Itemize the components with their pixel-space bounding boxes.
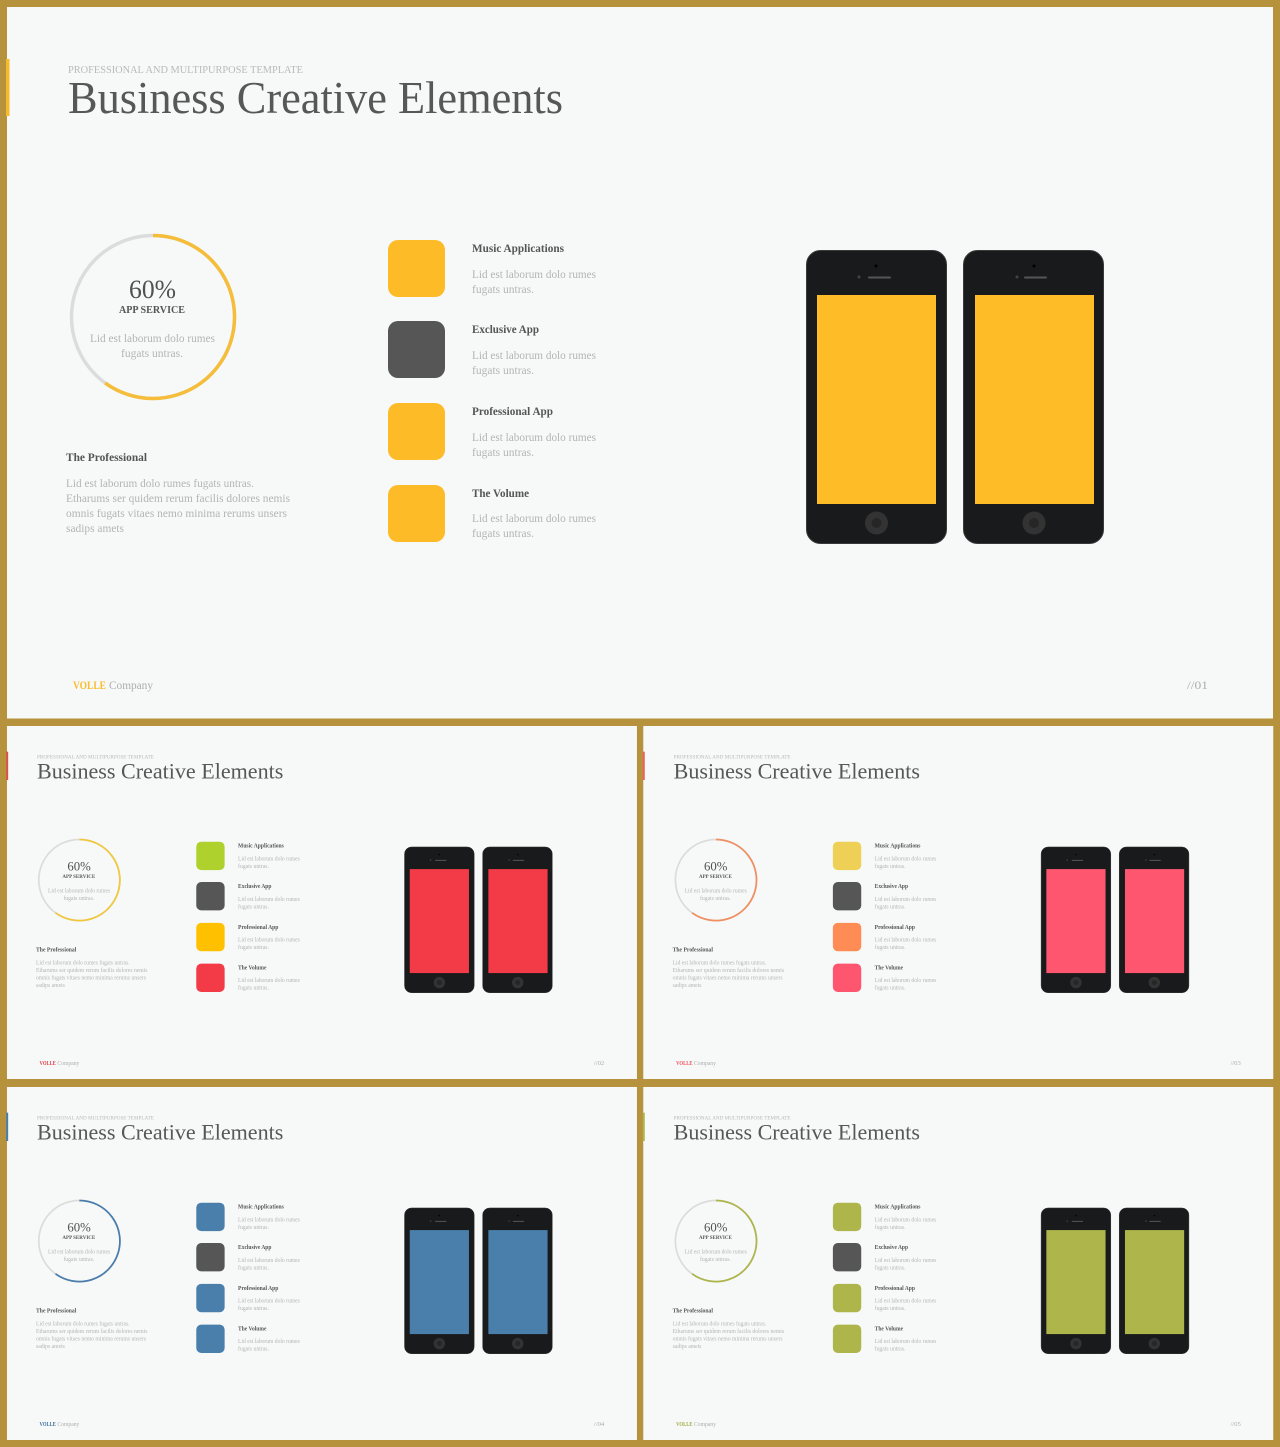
item: music applications: fugats untras.: [238, 1224, 269, 1231]
item: music applications: Lid est laborum dolo rumes: [875, 1218, 937, 1224]
item: music applications: Music Applications: [875, 1205, 921, 1211]
footer brand: VOLLE: [676, 1422, 693, 1428]
feature list: [833, 842, 937, 992]
subtitle: PROFESSIONAL AND MULTIPURPOSE TEMPLATE: [68, 65, 303, 76]
text block: the professional: sadips amets: [66, 523, 125, 535]
item: music applications: Lid est laborum dolo rumes: [875, 857, 937, 863]
page number: //02: [594, 1061, 604, 1067]
item: the volume: The Volume: [875, 966, 903, 972]
phone right: [1119, 1208, 1189, 1354]
subtitle: PROFESSIONAL AND MULTIPURPOSE TEMPLATE: [674, 755, 791, 761]
item: exclusive app: Exclusive App: [472, 324, 539, 336]
ring label: [90, 275, 216, 360]
item: the volume: The Volume: [472, 488, 529, 500]
item: exclusive app: fugats untras.: [472, 365, 534, 377]
phone left: [405, 1208, 474, 1354]
item: the volume: Lid est laborum dolo rumes: [875, 1339, 937, 1345]
title: Business Creative Elements: [37, 759, 283, 784]
footer brand: Company: [694, 1061, 716, 1067]
footer brand: VOLLE: [73, 680, 106, 692]
text block: the professional: [36, 948, 148, 989]
item: exclusive app: Exclusive App: [875, 884, 908, 890]
item: professional app: Lid est laborum dolo rumes: [472, 432, 597, 444]
text block: the professional: omnis fugats vitaes nemo minima rerums unsers: [673, 1336, 783, 1343]
footer brand: VOLLE: [40, 1422, 56, 1428]
text block: the professional: omnis fugats vitaes nemo minima rerums unsers: [673, 975, 783, 982]
item: professional app: fugats untras.: [472, 447, 534, 459]
accent bar: [643, 752, 645, 780]
ring label: 60%: [129, 275, 176, 304]
footer brand: [676, 1422, 716, 1428]
item: professional app: Professional App: [238, 925, 278, 931]
text block: the professional: Etharums ser quidem rerum facilis dolores nemis: [36, 967, 148, 974]
ring label: fugats untras.: [63, 1256, 95, 1263]
item: music applications: fugats untras.: [472, 284, 534, 296]
item: music applications: Lid est laborum dolo rumes: [238, 857, 301, 863]
ring label: [48, 1220, 111, 1263]
item: the volume: Lid est laborum dolo rumes: [875, 978, 937, 984]
text block: the professional: Lid est laborum dolo rumes fugats untras.: [36, 1321, 130, 1328]
footer brand: Company: [57, 1061, 79, 1067]
footer brand: VOLLE: [676, 1061, 693, 1067]
item: the volume: fugats untras.: [875, 1346, 906, 1353]
text block: the professional: [673, 1309, 785, 1350]
item: exclusive app: fugats untras.: [238, 903, 269, 910]
item: the volume: The Volume: [238, 966, 267, 972]
item: professional app: Lid est laborum dolo rumes: [238, 1299, 301, 1305]
footer brand: [40, 1061, 79, 1067]
item: exclusive app: [833, 1243, 937, 1271]
item: music applications: [833, 1203, 937, 1231]
subtitle: PROFESSIONAL AND MULTIPURPOSE TEMPLATE: [674, 1116, 791, 1122]
feature list: [196, 1203, 301, 1353]
item: music applications: [388, 240, 597, 297]
item: exclusive app: Lid est laborum dolo rumes: [875, 897, 937, 903]
footer brand: [676, 1061, 716, 1067]
ring label: 60%: [704, 859, 728, 874]
footer brand: Company: [57, 1422, 79, 1428]
progress ring: [39, 839, 120, 921]
feature list: [833, 1203, 937, 1353]
item: professional app: Professional App: [238, 1286, 278, 1292]
item: music applications: fugats untras.: [238, 863, 269, 870]
text block: the professional: omnis fugats vitaes nemo minima rerums unsers: [36, 1336, 147, 1343]
phone left: [806, 250, 946, 544]
phone right: [483, 847, 552, 993]
footer brand: Company: [694, 1422, 716, 1428]
page number: //05: [1230, 1422, 1241, 1428]
ring label: fugats untras.: [63, 895, 95, 902]
subtitle: PROFESSIONAL AND MULTIPURPOSE TEMPLATE: [37, 755, 154, 761]
progress ring: [72, 235, 235, 398]
text block: the professional: sadips amets: [36, 1344, 66, 1350]
item: professional app: [196, 923, 301, 951]
item: professional app: fugats untras.: [875, 1305, 906, 1312]
ring label: 60%: [67, 1220, 91, 1235]
item: the volume: fugats untras.: [875, 985, 906, 992]
item: the volume: fugats untras.: [238, 985, 269, 992]
ring label: APP SERVICE: [699, 874, 732, 880]
item: professional app: Lid est laborum dolo rumes: [875, 1299, 937, 1305]
ring label: Lid est laborum dolo rumes: [48, 1249, 111, 1255]
item: the volume: fugats untras.: [472, 528, 534, 540]
item: exclusive app: [388, 321, 597, 378]
text block: the professional: sadips amets: [673, 983, 702, 989]
ring label: Lid est laborum dolo rumes: [48, 888, 111, 894]
item: professional app: Lid est laborum dolo rumes: [238, 938, 301, 944]
page number: //01: [1187, 680, 1208, 692]
item: exclusive app: [833, 882, 937, 910]
panel: red slide: [6, 726, 637, 1079]
text block: the professional: The Professional: [673, 948, 713, 954]
item: professional app: [196, 1284, 301, 1312]
ring label: [685, 859, 748, 902]
item: exclusive app: fugats untras.: [875, 903, 906, 910]
text block: the professional: [66, 452, 291, 535]
text block: the professional: Lid est laborum dolo rumes fugats untras.: [673, 960, 767, 967]
text block: the professional: The Professional: [36, 1309, 77, 1315]
item: music applications: Music Applications: [238, 844, 285, 850]
page number: //03: [1230, 1061, 1241, 1067]
title: Business Creative Elements: [674, 1120, 920, 1145]
ring label: Lid est laborum dolo rumes: [685, 888, 748, 894]
item: the volume: [196, 1325, 301, 1353]
item: exclusive app: Lid est laborum dolo rumes: [238, 1258, 301, 1264]
phone left: [1041, 847, 1111, 993]
ring label: fugats untras.: [700, 1256, 731, 1263]
item: music applications: [833, 842, 937, 870]
item: exclusive app: Lid est laborum dolo rumes: [875, 1258, 937, 1264]
text block: the professional: Etharums ser quidem rerum facilis dolores nemis: [66, 493, 291, 505]
accent bar: [6, 59, 10, 116]
phone right: [964, 250, 1104, 544]
ring label: [685, 1220, 748, 1263]
progress ring: [675, 839, 757, 921]
text block: the professional: The Professional: [36, 948, 77, 954]
item: professional app: fugats untras.: [875, 944, 906, 951]
ring label: fugats untras.: [121, 348, 183, 360]
item: exclusive app: Exclusive App: [875, 1245, 908, 1251]
text block: the professional: Lid est laborum dolo rumes fugats untras.: [673, 1321, 767, 1328]
ring label: 60%: [704, 1220, 728, 1235]
text block: the professional: Etharums ser quidem rerum facilis dolores nemis: [673, 967, 785, 974]
title: Business Creative Elements: [674, 759, 920, 784]
ring label: fugats untras.: [700, 895, 731, 902]
phone right: [1119, 847, 1189, 993]
item: music applications: fugats untras.: [875, 1224, 906, 1231]
item: professional app: Professional App: [875, 1286, 915, 1292]
item: professional app: Professional App: [875, 925, 915, 931]
subtitle: PROFESSIONAL AND MULTIPURPOSE TEMPLATE: [37, 1116, 154, 1122]
item: music applications: [196, 1203, 301, 1231]
ring label: Lid est laborum dolo rumes: [685, 1249, 748, 1255]
item: the volume: The Volume: [238, 1327, 267, 1333]
accent bar: [643, 1113, 645, 1141]
panel: olive slide: [643, 1087, 1273, 1440]
text block: the professional: Etharums ser quidem rerum facilis dolores nemis: [36, 1328, 148, 1335]
item: the volume: [388, 485, 597, 542]
feature list: [388, 240, 597, 542]
ring label: Lid est laborum dolo rumes: [90, 333, 216, 345]
phone left: [405, 847, 474, 993]
item: exclusive app: [196, 1243, 301, 1271]
accent bar: [6, 1113, 8, 1141]
ring label: APP SERVICE: [62, 874, 96, 880]
item: music applications: fugats untras.: [875, 863, 906, 870]
text block: the professional: omnis fugats vitaes nemo minima rerums unsers: [66, 508, 288, 520]
item: the volume: Lid est laborum dolo rumes: [472, 513, 597, 525]
text block: the professional: sadips amets: [673, 1344, 702, 1350]
phone right: [483, 1208, 552, 1354]
ring label: APP SERVICE: [119, 304, 185, 316]
title: Business Creative Elements: [37, 1120, 283, 1145]
progress ring: [675, 1200, 757, 1282]
item: exclusive app: Lid est laborum dolo rumes: [238, 897, 301, 903]
ring label: 60%: [67, 859, 91, 874]
item: music applications: [196, 842, 301, 870]
item: exclusive app: fugats untras.: [875, 1264, 906, 1271]
item: the volume: Lid est laborum dolo rumes: [238, 978, 301, 984]
accent bar: [6, 752, 8, 780]
text block: the professional: [673, 948, 785, 989]
text block: the professional: Lid est laborum dolo rumes fugats untras.: [36, 960, 130, 967]
panel: pink slide: [643, 726, 1273, 1079]
item: professional app: [388, 403, 597, 460]
panel: large yellow slide: [6, 7, 1273, 718]
item: music applications: Music Applications: [238, 1205, 285, 1211]
item: exclusive app: [196, 882, 301, 910]
item: exclusive app: Lid est laborum dolo rumes: [472, 350, 597, 362]
title: Business Creative Elements: [68, 73, 563, 123]
ring label: APP SERVICE: [699, 1235, 732, 1241]
progress ring: [39, 1200, 120, 1282]
panel: blue slide: [6, 1087, 637, 1440]
page number: //04: [594, 1422, 604, 1428]
phone left: [1041, 1208, 1111, 1354]
item: exclusive app: fugats untras.: [238, 1264, 269, 1271]
footer brand: Company: [109, 680, 153, 692]
item: the volume: [833, 964, 937, 992]
text block: the professional: sadips amets: [36, 983, 66, 989]
footer brand: [40, 1422, 79, 1428]
item: professional app: [833, 923, 937, 951]
item: professional app: Professional App: [472, 406, 553, 418]
item: exclusive app: Exclusive App: [238, 1245, 271, 1251]
item: exclusive app: Exclusive App: [238, 884, 271, 890]
text block: the professional: The Professional: [673, 1309, 713, 1315]
item: music applications: Lid est laborum dolo rumes: [472, 269, 597, 281]
item: professional app: fugats untras.: [238, 944, 269, 951]
text block: the professional: The Professional: [66, 452, 147, 464]
text block: the professional: Lid est laborum dolo rumes fugats untras.: [66, 478, 254, 490]
item: professional app: fugats untras.: [238, 1305, 269, 1312]
text block: the professional: [36, 1309, 148, 1350]
item: the volume: Lid est laborum dolo rumes: [238, 1339, 301, 1345]
item: professional app: [833, 1284, 937, 1312]
item: the volume: The Volume: [875, 1327, 903, 1333]
item: music applications: Music Applications: [875, 844, 921, 850]
feature list: [196, 842, 301, 992]
ring label: [48, 859, 111, 902]
ring label: APP SERVICE: [62, 1235, 96, 1241]
item: the volume: fugats untras.: [238, 1346, 269, 1353]
item: music applications: Lid est laborum dolo rumes: [238, 1218, 301, 1224]
footer brand: [73, 680, 153, 692]
item: professional app: Lid est laborum dolo rumes: [875, 938, 937, 944]
item: the volume: [833, 1325, 937, 1353]
text block: the professional: omnis fugats vitaes nemo minima rerums unsers: [36, 975, 147, 982]
text block: the professional: Etharums ser quidem rerum facilis dolores nemis: [673, 1328, 785, 1335]
item: music applications: Music Applications: [472, 243, 564, 255]
footer brand: VOLLE: [40, 1061, 56, 1067]
item: the volume: [196, 964, 301, 992]
